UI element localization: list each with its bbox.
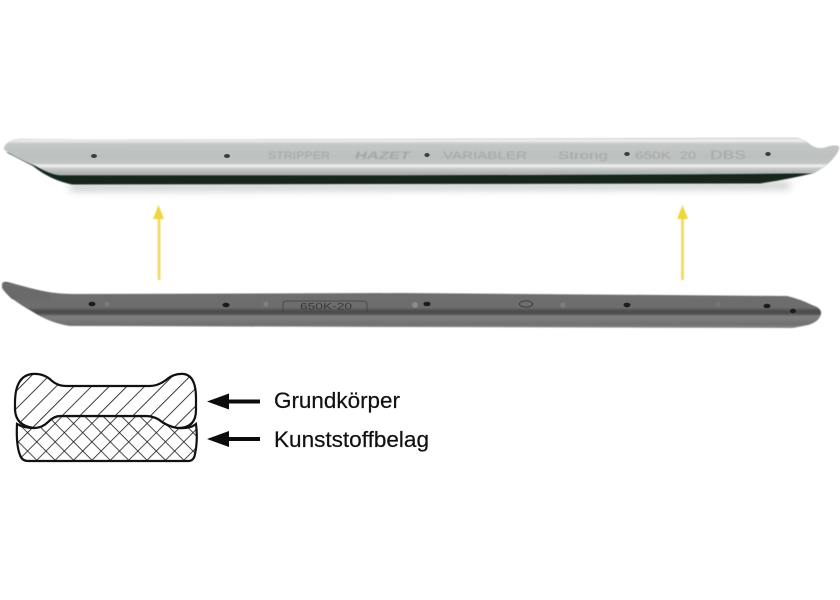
steel engraved lettering: [268, 148, 746, 162]
grey lever faint marks: [104, 301, 720, 308]
grey lever part number plate: 650K-20: [300, 302, 352, 312]
green-black coating: [6, 152, 814, 184]
steel engraved lettering: DBS: [710, 148, 746, 162]
steel engraved lettering: VARIABLER: [443, 150, 527, 162]
grey lever molded logo: [520, 301, 532, 307]
steel engraved lettering: HAZET: [355, 150, 412, 162]
yellow arrow left: [153, 205, 164, 280]
grey lever tapered left shading: [3, 285, 50, 300]
steel engraved lettering: 20: [680, 150, 696, 162]
arrow to Kunststoffbelag: [207, 431, 260, 447]
label: Grundkörper: Grundkörper: [274, 388, 400, 413]
bottom lever: grey plastic coating: [2, 282, 821, 328]
top lever: polished steel base body: [4, 138, 839, 191]
yellow arrow right: [677, 205, 688, 280]
steel upper surface: [4, 138, 839, 175]
arrow to Grundkörper: [207, 394, 260, 410]
cross-section diagram: [15, 374, 197, 461]
grey lever part number plate: [283, 301, 367, 313]
base body section, diagonal hatched: [15, 374, 196, 428]
shadow under steel lever: [70, 182, 790, 191]
label: Kunststoffbelag: Kunststoffbelag: [274, 427, 429, 452]
steel engraved lettering: Strong: [558, 150, 608, 162]
coating section, cross-hatched: [17, 416, 197, 461]
grey lever rivet holes: [88, 302, 796, 313]
grey lever body: [2, 282, 821, 328]
steel engraved lettering: STRIPPER: [268, 150, 330, 162]
steel engraved lettering: 650K: [635, 150, 672, 162]
steel rivet holes: [91, 152, 771, 158]
